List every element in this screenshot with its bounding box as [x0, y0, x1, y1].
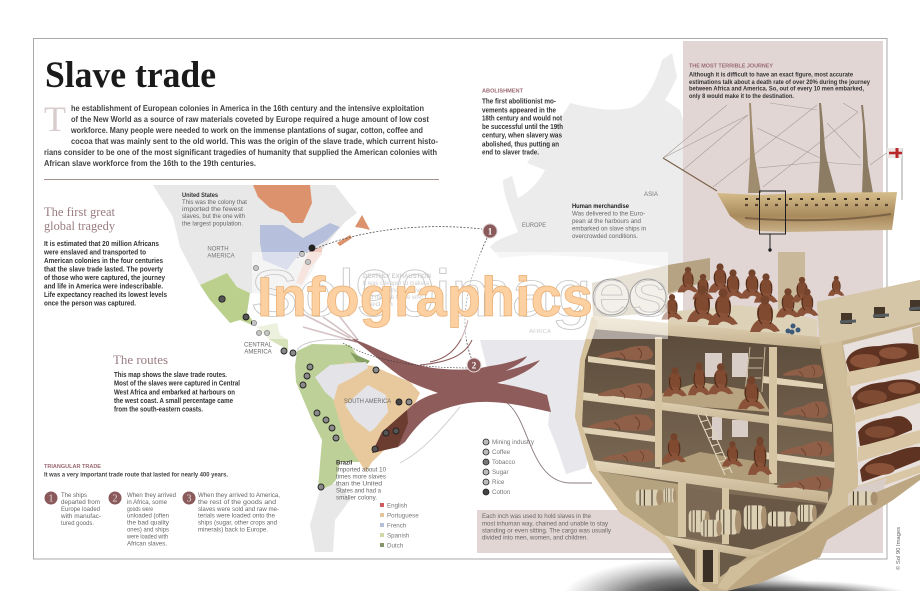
callout: human merchandise: embarked on slave ships in	[572, 226, 646, 232]
text: the first great global tragedy: of those who were captured, the journey	[44, 275, 165, 282]
text: the most terrible journey: Although it is difficult to have an exact figure, most accurate	[689, 72, 853, 79]
text: abolishment: vements appeared in the	[482, 107, 556, 114]
figures: deck captives	[662, 263, 844, 332]
routes: thin strands to the Caribbean	[295, 310, 358, 342]
text: the first great global tragedy: It is estimated that 20 million Africans	[44, 241, 159, 248]
heading: the first great global tragedy: The first great	[44, 204, 115, 219]
step 1	[44, 492, 101, 527]
step 1: tured goods.	[61, 521, 94, 527]
text: cargo note: divided into men, women, and children.	[482, 536, 588, 542]
shadow beneath ship, left	[560, 556, 820, 591]
title: Slave trade	[45, 55, 216, 96]
routes: thin grey Cape route	[507, 403, 592, 483]
hold wall, left	[597, 471, 678, 537]
keel bays	[667, 543, 747, 580]
step 2: were loaded with	[126, 534, 168, 540]
step 3: minerals) back to Europe.	[198, 528, 268, 534]
marker 2	[467, 358, 481, 372]
step 3: slaves were sold and raw me-	[198, 507, 279, 513]
interior, left and center	[582, 325, 835, 553]
step 3: 3	[186, 494, 192, 504]
watermark wash	[252, 252, 668, 339]
shadow beneath ship, right	[660, 578, 920, 591]
gun ports	[841, 300, 920, 324]
routes: Atlantic curves	[420, 320, 472, 365]
legend: colonial powers: English	[387, 502, 408, 510]
text: cargo note	[482, 514, 611, 542]
marker 1	[483, 224, 497, 238]
callout: Brazil	[336, 460, 387, 501]
text: deathly exhaustion note: trip with more slaves	[363, 288, 427, 294]
outer hull plank left	[575, 316, 712, 591]
step 2: African slaves.	[127, 541, 167, 547]
map: English colonies, east coast	[296, 247, 322, 285]
legend: resources: Cotton	[492, 489, 511, 496]
map: Spanish Mexico	[200, 273, 257, 327]
rigging	[663, 103, 888, 187]
callout: human merchandise: Was delivered to the Euro-	[572, 212, 645, 218]
routes: return curve near Brazil	[297, 339, 460, 463]
map: interior gray regions	[315, 362, 388, 432]
panel: triangular trade	[44, 464, 280, 547]
label: Central America	[244, 342, 273, 356]
step 3: the rest of the goods and	[198, 500, 276, 506]
callout: human merchandise: Human merchandise	[572, 204, 630, 210]
intro paragraph: of the New World as a source of raw materials coveted by Europe required a huge amount of low cost	[71, 115, 429, 124]
legend: resources: Rice	[492, 479, 505, 486]
watermark: digit discs	[593, 279, 666, 315]
hold wall, right	[729, 494, 828, 552]
text: the first great global tragedy: and life in America were indescribable.	[44, 284, 163, 291]
map: Arctic Canada (English)	[253, 185, 312, 223]
text: the first great global tragedy: that the slave trade lasted. The poverty	[44, 267, 163, 274]
step 2: unloaded (often	[127, 514, 169, 520]
heading: the first great global tragedy: global tragedy	[44, 218, 115, 233]
callout: human merchandise: pean at the harbours and	[572, 219, 641, 225]
text: the routes	[114, 372, 240, 414]
callout: United States: imported the fewest	[182, 207, 243, 213]
label: Central America: AMERICA	[244, 350, 272, 356]
hull silhouette	[575, 280, 920, 591]
text: deathly exhaustion note: died on	[363, 302, 393, 308]
callout: human merchandise	[572, 204, 646, 240]
label: Central America: CENTRAL	[244, 342, 273, 348]
label: Asia: ASIA	[644, 192, 658, 198]
step 2: the bad quality	[127, 521, 169, 527]
hold floor	[655, 534, 767, 558]
hold wall, center	[686, 487, 722, 543]
text: the routes: West Africa and embarked at harbours on	[114, 389, 235, 396]
step 2: ones) and ships	[127, 528, 169, 534]
panel: cargo note background	[477, 510, 883, 553]
text: deathly exhaustion note: It was cheaper to make a	[363, 281, 430, 287]
step 3: ships (sugar, other crops and	[198, 521, 277, 527]
map: Europe and Asia	[490, 53, 683, 268]
right wall	[817, 280, 920, 345]
map: Patagonia	[310, 482, 350, 552]
label: Africa: AFRICA	[529, 329, 551, 335]
step 1: The ships	[61, 493, 87, 499]
marker 1: 1	[488, 226, 493, 236]
text: the first great global tragedy: were enslaved and transported to	[43, 250, 146, 256]
callout: Brazil: smaller colony.	[336, 495, 377, 501]
step 3: terials were loaded onto the	[198, 514, 276, 520]
routes: dotted track	[343, 343, 473, 368]
watermark: Infographics: Infographics	[257, 265, 593, 328]
step 1: 1	[48, 494, 54, 504]
right decks	[847, 358, 920, 495]
drop cap: T	[44, 99, 66, 139]
heading: the first great global tragedy	[44, 204, 115, 233]
text: the routes: This map shows the slave trade routes.	[114, 372, 227, 379]
text: the most terrible journey: estimations talk about a death rate of over 20% during the journey	[689, 79, 870, 86]
legend: colonial powers: Spanish	[387, 532, 410, 540]
open view between decks	[705, 353, 748, 440]
posts	[655, 337, 777, 584]
intro paragraph	[44, 99, 438, 168]
outer hull bow	[727, 474, 920, 590]
watermark: outline wordmark: Sol90images	[250, 256, 668, 330]
masts and sails	[748, 103, 873, 193]
callout: United States: slaves, but the one with	[182, 214, 245, 220]
text: the routes: Most of the slaves were captured in Central	[114, 381, 240, 388]
routes: main slave flows	[352, 339, 551, 453]
text: abolishment: be successful until the 19th	[482, 124, 563, 131]
marker 2: 2	[472, 360, 477, 370]
legend: resources: Sugar	[492, 469, 509, 476]
right hull post	[912, 326, 920, 358]
text: cargo note: Each inch was used to hold slaves in the	[482, 514, 592, 520]
main deck surface	[668, 305, 817, 345]
text: the first great global tragedy: once the person was captured.	[44, 300, 136, 308]
right interior open background	[843, 325, 920, 497]
callout: United States: the largest population.	[182, 222, 243, 228]
upper deck floor	[660, 382, 770, 412]
legend: colonial powers: French	[387, 522, 407, 530]
step 3: When they arrived to America,	[198, 493, 280, 499]
text: cargo note: standing or even sitting. The cargo was usually	[482, 529, 611, 535]
heading: the routes: The routes	[113, 352, 168, 367]
text: the routes: from the south-eastern coasts.	[114, 406, 203, 414]
text: the most terrible journey: only 8 would make it to the destination.	[689, 93, 794, 100]
lower deck floor	[660, 452, 775, 485]
text: the most terrible journey	[689, 64, 870, 100]
text: abolishment	[482, 88, 563, 157]
callout: United States	[182, 193, 247, 228]
cutaway selection box	[760, 191, 786, 251]
shelves	[582, 356, 835, 468]
text: abolishment: abolished, thus putting an	[482, 141, 559, 148]
rib	[717, 300, 858, 590]
step 1: with manufac-	[60, 514, 101, 520]
legend: resources	[483, 439, 535, 496]
step 2: When they arrived	[127, 493, 176, 499]
map: Spanish South America	[295, 344, 370, 496]
icons: resource markers on map	[219, 245, 412, 490]
callout: Brazil: Brazil	[336, 460, 353, 466]
subheading: It was a very important trade route that lasted for nearly 400 years.	[44, 472, 228, 478]
intro paragraph: African slave workforce from the 16th to the 19th centuries.	[44, 159, 256, 168]
figures: center and left hold captives	[588, 346, 833, 490]
text: abolishment: ABOLISHMENT	[482, 88, 524, 94]
label: North America: NORTH	[207, 246, 229, 252]
label: North America: AMERICA	[207, 254, 235, 260]
step 1: Europe loaded	[61, 507, 100, 513]
legend: colonial powers: Dutch	[387, 542, 404, 550]
hull	[717, 192, 897, 232]
cannonballs	[786, 324, 800, 334]
map: French colonies	[260, 223, 340, 270]
map: Dutch Guiana	[350, 352, 370, 364]
step 2: 2	[112, 494, 118, 504]
heading: TRIANGULAR TRADE	[44, 464, 101, 470]
text: abolishment: The first abolitionist mo-	[482, 99, 557, 106]
map: North America	[153, 185, 357, 295]
intro paragraph: cocoa that was mainly sent to the old world. This was the origin of the slave trade, which current histo-	[71, 137, 438, 146]
text: abolishment: end to slaver trade.	[482, 150, 539, 157]
callout: United States: This was the colony that	[182, 200, 247, 206]
barrels	[636, 488, 878, 537]
text: the most terrible journey: THE MOST TERRIBLE JOURNEY	[689, 64, 773, 70]
text: deathly exhaustion note	[363, 274, 431, 308]
map: Atlantic Canada (English)	[337, 215, 370, 246]
lower right opening	[848, 478, 887, 510]
credit: © Sol 90 Images	[895, 527, 902, 570]
intro paragraph: workforce. Many people were needed to work on the immense plantations of sugar, cotton, coffee and	[70, 126, 423, 135]
intro paragraph: rians consider to be one of the most significant tragedies of humanity that supplied the American colonies with	[44, 148, 437, 157]
flag	[887, 148, 902, 200]
step 1: departed from	[61, 500, 100, 506]
label: North America	[207, 246, 235, 260]
callout: human merchandise: overcrowded conditions.	[572, 234, 638, 240]
illustration: ship cross-section	[560, 252, 920, 591]
callout: Brazil: States and had a	[336, 488, 382, 494]
map: Central America	[257, 323, 288, 350]
callout: Brazil: Imported about 10	[336, 467, 387, 473]
arrow: dark head on Brazil	[372, 410, 408, 453]
upper ladder	[745, 347, 765, 392]
text: abolishment: century, when slavery was	[482, 133, 562, 140]
text: the first great global tragedy: Life expectancy reached its lowest levels	[44, 292, 167, 299]
routes: dashed route 2	[465, 238, 487, 360]
text: deathly exhaustion note: and replace those who	[363, 295, 424, 301]
map: Africa	[480, 340, 590, 474]
text: the routes: the west coast. A small percentage came	[114, 398, 233, 405]
gun ports	[745, 198, 887, 200]
label: South America: SOUTH AMERICA	[344, 399, 391, 405]
legend: resources: Coffee	[492, 449, 511, 456]
label: Europe: EUROPE	[522, 223, 546, 229]
text: the first great global tragedy	[43, 241, 167, 308]
legend: colonial powers	[380, 502, 419, 550]
legend: colonial powers: Portuguese	[387, 512, 419, 520]
right captives clumps	[846, 343, 920, 482]
map: world landmasses and colonies	[153, 53, 683, 552]
step 2	[108, 492, 176, 547]
text: abolishment: 18th century and would not	[482, 116, 563, 123]
callout: Brazil: than the United	[336, 481, 382, 487]
step 2: in Africa, some	[127, 500, 168, 506]
step 2: goods were	[127, 507, 154, 513]
text: deathly exhaustion note: DEATHLY EXHAUSTION	[363, 274, 431, 280]
post	[778, 252, 805, 312]
legend: resources: Tobacco	[492, 459, 516, 466]
main deck edge	[593, 316, 820, 349]
far rail	[592, 258, 710, 318]
routes: dashed route 1	[297, 227, 482, 258]
legend: resources: Mining industry	[492, 439, 535, 446]
callout: United States: United States	[182, 193, 219, 199]
text: the most terrible journey: between Africa and America. So, out of every 10 men embarked,	[689, 86, 864, 93]
text: the first great global tragedy: American colonies in the four centuries	[44, 258, 163, 265]
map: Portuguese Brazil	[332, 362, 420, 472]
intro paragraph: he establishment of European colonies in America in the 16th century and the intensive exploitation	[71, 104, 424, 113]
panel: the most terrible journey background	[683, 41, 883, 553]
hold ladder	[698, 413, 732, 475]
illustration: sailing ship	[663, 103, 902, 251]
text: cargo note: most inhuman way, chained and unable to stay	[482, 522, 608, 528]
bowsprit	[663, 158, 717, 191]
callout: Brazil: times more slaves	[336, 474, 386, 480]
step 3	[182, 492, 280, 534]
